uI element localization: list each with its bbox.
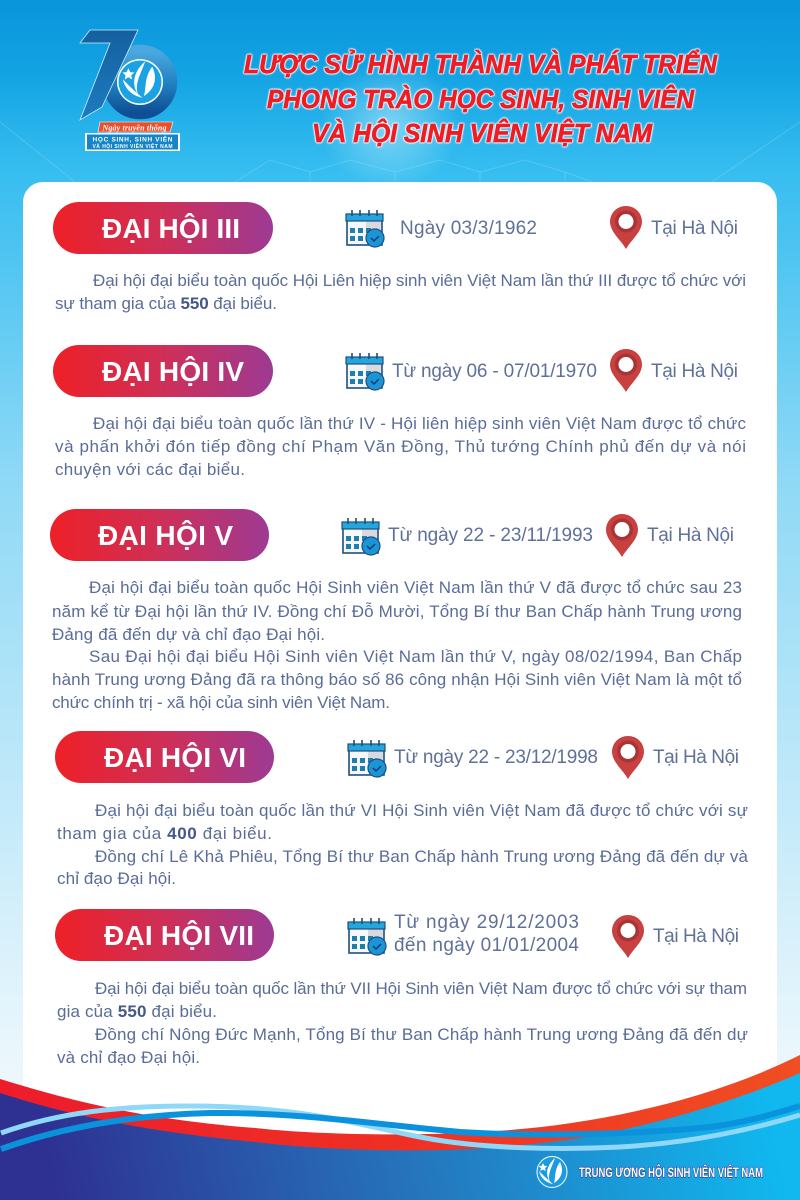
logo numeral 7 <box>80 30 138 120</box>
body text: chỉ đạo Đại hội. <box>57 869 176 888</box>
body text: chức chính trị - xã hội của sinh viên Việt Nam. <box>52 693 390 712</box>
body text <box>55 414 746 479</box>
heading pill <box>53 345 273 397</box>
body text: năm kể từ Đại hội lần thứ IV. Đồng chí Đỗ Mười, Tổng Bí thư Ban Chấp hành Trung ương <box>52 602 742 621</box>
title: VÀ HỘI SINH VIÊN VIỆT NAM <box>312 118 653 148</box>
body text: Đảng đã đến dự và chỉ đạo Đại hội. <box>52 625 325 644</box>
body text: Đại hội đại biểu toàn quốc lần thứ IV - Hội liên hiệp sinh viên Việt Nam được tổ chức <box>93 414 746 433</box>
date: Từ ngày 29/12/2003 <box>394 912 579 933</box>
logo blue banner: VÀ HỘI SINH VIÊN VIỆT NAM <box>92 142 172 150</box>
heading pill: ĐẠI HỘI V <box>98 519 233 551</box>
heading pill: ĐẠI HỘI III <box>102 212 240 244</box>
date: Ngày 03/3/1962 <box>400 218 537 239</box>
icon: map pin <box>612 736 644 779</box>
icon: calendar <box>342 518 380 555</box>
heading pill <box>55 731 274 783</box>
icon: map pin <box>606 514 638 557</box>
section: Đại hội VII <box>55 909 748 1067</box>
section: Đại hội VI <box>55 731 749 888</box>
logo blue banner <box>85 133 180 151</box>
body text: tham gia của 400 đại biểu. <box>57 824 272 843</box>
date: đến ngày 01/01/2004 <box>394 935 579 956</box>
heading pill: ĐẠI HỘI VII <box>104 919 254 951</box>
icon: map pin <box>610 349 642 392</box>
section: Đại hội IV <box>53 345 746 479</box>
body text: sự tham gia của 550 đại biểu. <box>55 294 277 313</box>
title: PHONG TRÀO HỌC SINH, SINH VIÊN <box>267 84 695 114</box>
location: Tại Hà Nội <box>647 525 734 546</box>
date <box>394 912 579 956</box>
icon: calendar <box>346 353 384 390</box>
title <box>244 49 718 148</box>
icon: map pin <box>610 206 642 249</box>
logo: 70 years <box>80 30 180 151</box>
body text: chuyện với các đại biểu. <box>55 460 245 479</box>
bottom wave band <box>0 1055 800 1200</box>
heading pill: ĐẠI HỘI VI <box>104 741 246 773</box>
icon: calendar <box>346 210 384 247</box>
icon: map pin <box>612 915 644 958</box>
body text: Đại hội đại biểu toàn quốc lần thứ VII Hội Sinh viên Việt Nam được tổ chức với sự tham <box>95 979 747 998</box>
body text <box>52 578 742 712</box>
heading pill <box>50 509 269 561</box>
logo emblem <box>117 59 163 105</box>
date: Từ ngày 06 - 07/01/1970 <box>392 361 597 382</box>
title: LƯỢC SỬ HÌNH THÀNH VÀ PHÁT TRIỂN <box>244 49 718 79</box>
location: Tại Hà Nội <box>651 361 738 382</box>
body text: và phấn khởi đón tiếp đồng chí Phạm Văn Đồng, Thủ tướng Chính phủ đến dự và nói <box>55 437 746 456</box>
body text: Đồng chí Nông Đức Mạnh, Tổng Bí thư Ban Chấp hành Trung ương Đảng đã đến dự <box>95 1025 748 1044</box>
icon: calendar <box>348 918 386 955</box>
section: Đại hội V <box>50 509 742 712</box>
body text <box>55 271 746 313</box>
body text <box>57 979 748 1067</box>
section: Đại hội III <box>53 202 746 313</box>
heading pill <box>53 202 273 254</box>
body text: Đại hội đại biểu toàn quốc Hội Liên hiệp sinh viên Việt Nam lần thứ III được tổ chức với <box>93 271 746 290</box>
logo red banner: Ngày truyền thống <box>102 124 166 132</box>
body text: Đồng chí Lê Khả Phiêu, Tổng Bí thư Ban Chấp hành Trung ương Đảng đã đến dự và <box>95 847 749 866</box>
heading pill <box>55 909 274 961</box>
footer logo <box>537 1156 567 1188</box>
body text: Đại hội đại biểu toàn quốc lần thứ VI Hội Sinh viên Việt Nam đã được tổ chức với sự <box>95 801 748 820</box>
date: Từ ngày 22 - 23/11/1993 <box>388 525 593 546</box>
body text: hành Trung ương Đảng đã ra thông báo số 86 công nhận Hội Sinh viên Việt Nam là một tổ <box>52 670 742 689</box>
panel: white content card <box>23 182 777 1182</box>
location: Tại Hà Nội <box>653 747 739 768</box>
logo numeral 0 ring <box>110 52 170 112</box>
location: Tại Hà Nội <box>651 218 738 239</box>
body text: Sau Đại hội đại biểu Hội Sinh viên Việt Nam lần thứ V, ngày 08/02/1994, Ban Chấp <box>89 647 742 666</box>
date: Từ ngày 22 - 23/12/1998 <box>394 747 598 768</box>
body text <box>57 801 749 888</box>
body text: gia của 550 đại biểu. <box>57 1002 217 1021</box>
body text: và chỉ đạo Đại hội. <box>57 1048 200 1067</box>
body text: Đại hội đại biểu toàn quốc Hội Sinh viên Việt Nam lần thứ V đã được tổ chức sau 23 <box>89 578 742 597</box>
logo blue banner: HỌC SINH, SINH VIÊN <box>92 134 173 144</box>
heading pill: ĐẠI HỘI IV <box>102 355 244 387</box>
location: Tại Hà Nội <box>653 926 739 947</box>
icon: calendar <box>348 740 386 777</box>
